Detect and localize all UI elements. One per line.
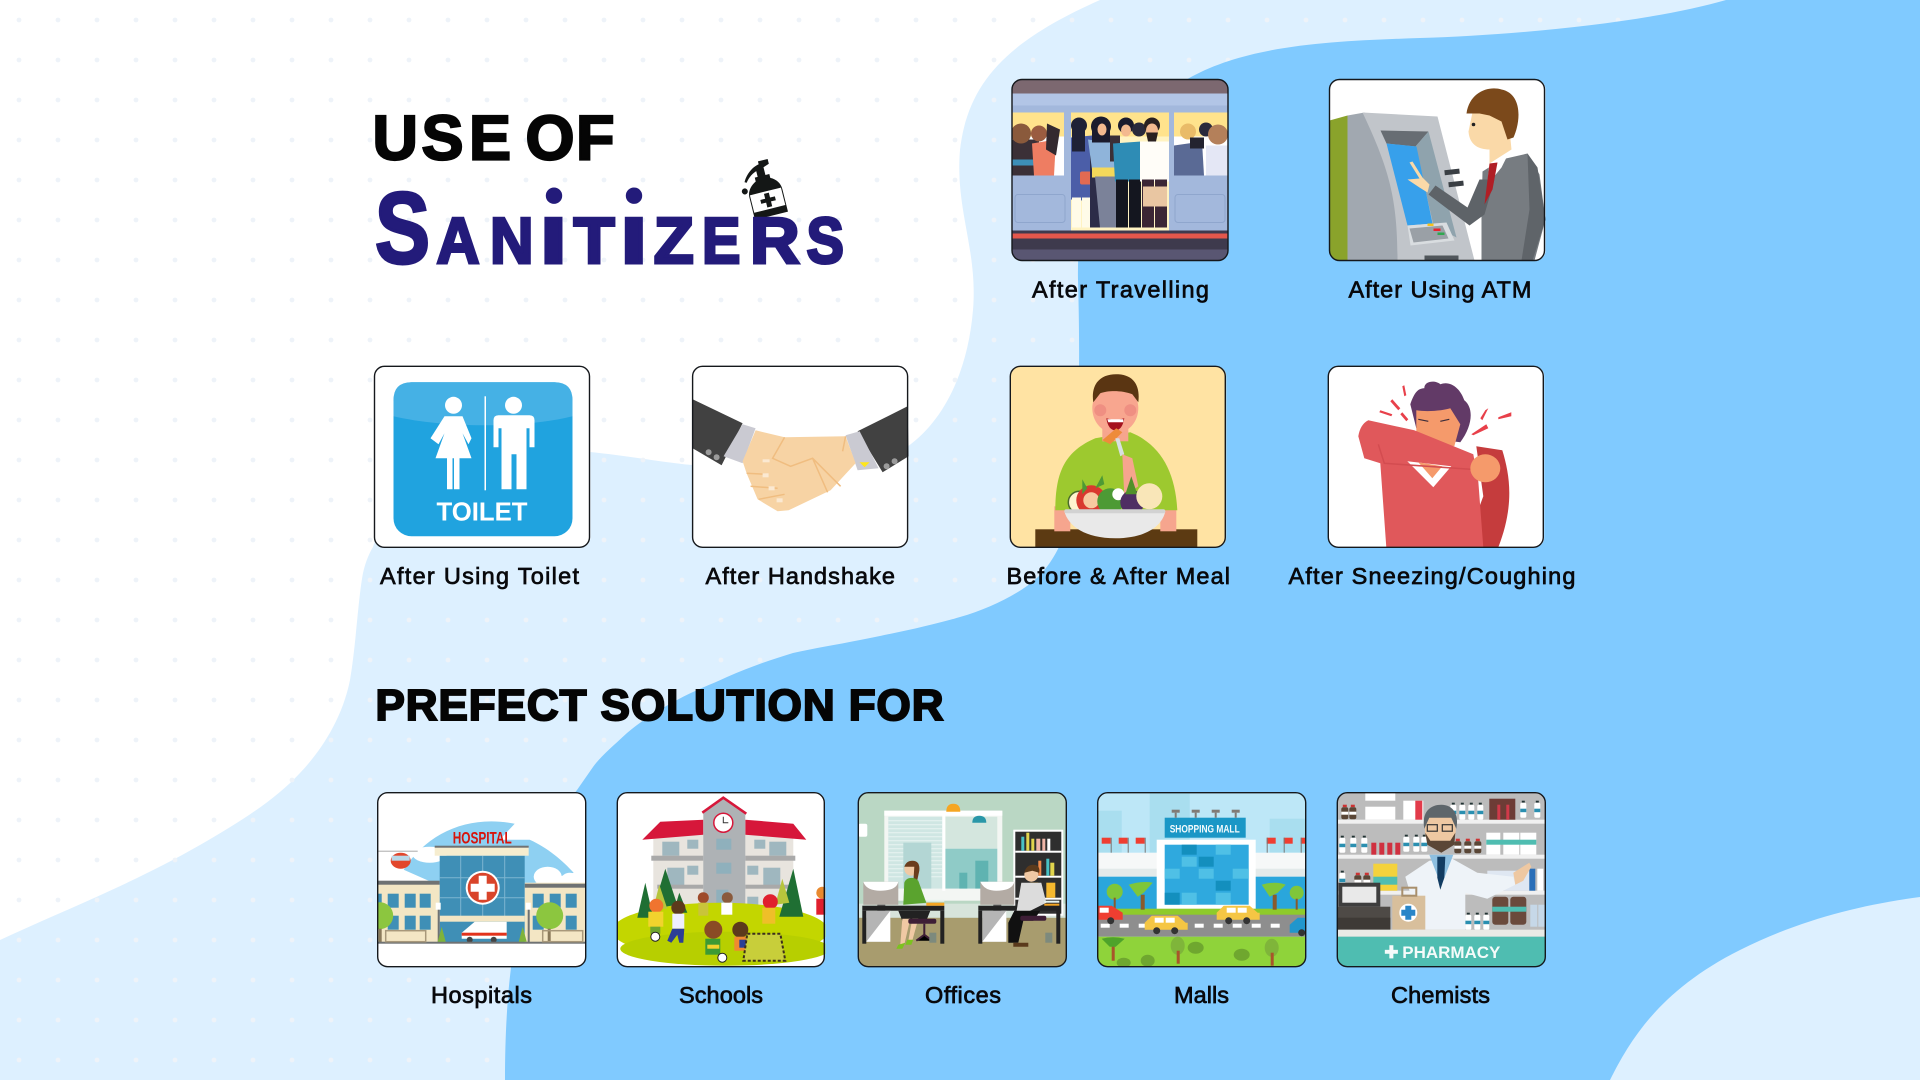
left window people	[1011, 124, 1060, 176]
label: after using toilet: After Using Toilet	[380, 563, 579, 589]
title: use of: USE OF	[372, 104, 614, 174]
card: chemists	[1337, 793, 1545, 967]
card: before and after meal	[1010, 366, 1226, 547]
title: sanitizers: T	[574, 204, 615, 277]
card: chemists: PHARMACY	[1402, 943, 1501, 962]
card: after travelling	[1011, 80, 1228, 260]
title: sanitizers: A	[436, 204, 480, 277]
icon: sanitizer bottle	[736, 157, 788, 221]
card: after sneezing or coughing	[1328, 366, 1544, 547]
children	[648, 887, 828, 962]
card: after using toilet: TOILET	[436, 496, 528, 526]
label: after sneezing or coughing: After Sneezing/Coughing	[1288, 563, 1576, 589]
right window people	[1174, 122, 1228, 176]
card: malls: SHOPPING MALL	[1170, 824, 1240, 836]
title: sanitizers: N	[490, 204, 534, 277]
label: after travelling: After Travelling	[1032, 276, 1209, 302]
card: malls	[1098, 793, 1306, 968]
label: after handshake: After Handshake	[706, 563, 895, 589]
card: chemists: ✚	[1384, 943, 1399, 962]
card: after handshake	[693, 366, 909, 547]
pharmacist	[1405, 805, 1531, 930]
card: hospitals: HOSPITAL	[453, 829, 512, 848]
title: sanitizers: I	[540, 204, 567, 277]
label: hospitals: Hospitals	[431, 982, 532, 1008]
label: before and after meal: Before & After Meal	[1006, 563, 1230, 589]
mall cars and trees	[1098, 882, 1306, 968]
title: sanitizers: I	[621, 204, 647, 277]
restroom figures	[430, 396, 534, 490]
card: offices	[858, 793, 1066, 967]
title: sanitizers: Z	[654, 204, 694, 277]
heading: perfect solution for: PREFECT SOLUTION FOR	[376, 681, 944, 730]
label: after using ATM: After Using ATM	[1348, 276, 1532, 302]
office workers	[896, 861, 1059, 949]
man at ATM	[1408, 88, 1546, 260]
card: hospitals	[366, 793, 586, 967]
label: malls: Malls	[1174, 982, 1229, 1008]
title: sanitizers: E	[702, 204, 740, 277]
title: sanitizers	[375, 173, 844, 285]
title: sanitizers: R	[750, 204, 800, 277]
label: offices: Offices	[925, 982, 1001, 1008]
label: schools: Schools	[679, 982, 763, 1008]
centre door people	[1071, 116, 1169, 228]
card: after using toilet	[374, 366, 590, 547]
title: sanitizers: S	[806, 204, 844, 277]
card: after using ATM	[1330, 80, 1546, 260]
title: sanitizers: S	[375, 173, 430, 285]
label: chemists: Chemists	[1391, 982, 1490, 1008]
card: schools	[612, 793, 830, 967]
